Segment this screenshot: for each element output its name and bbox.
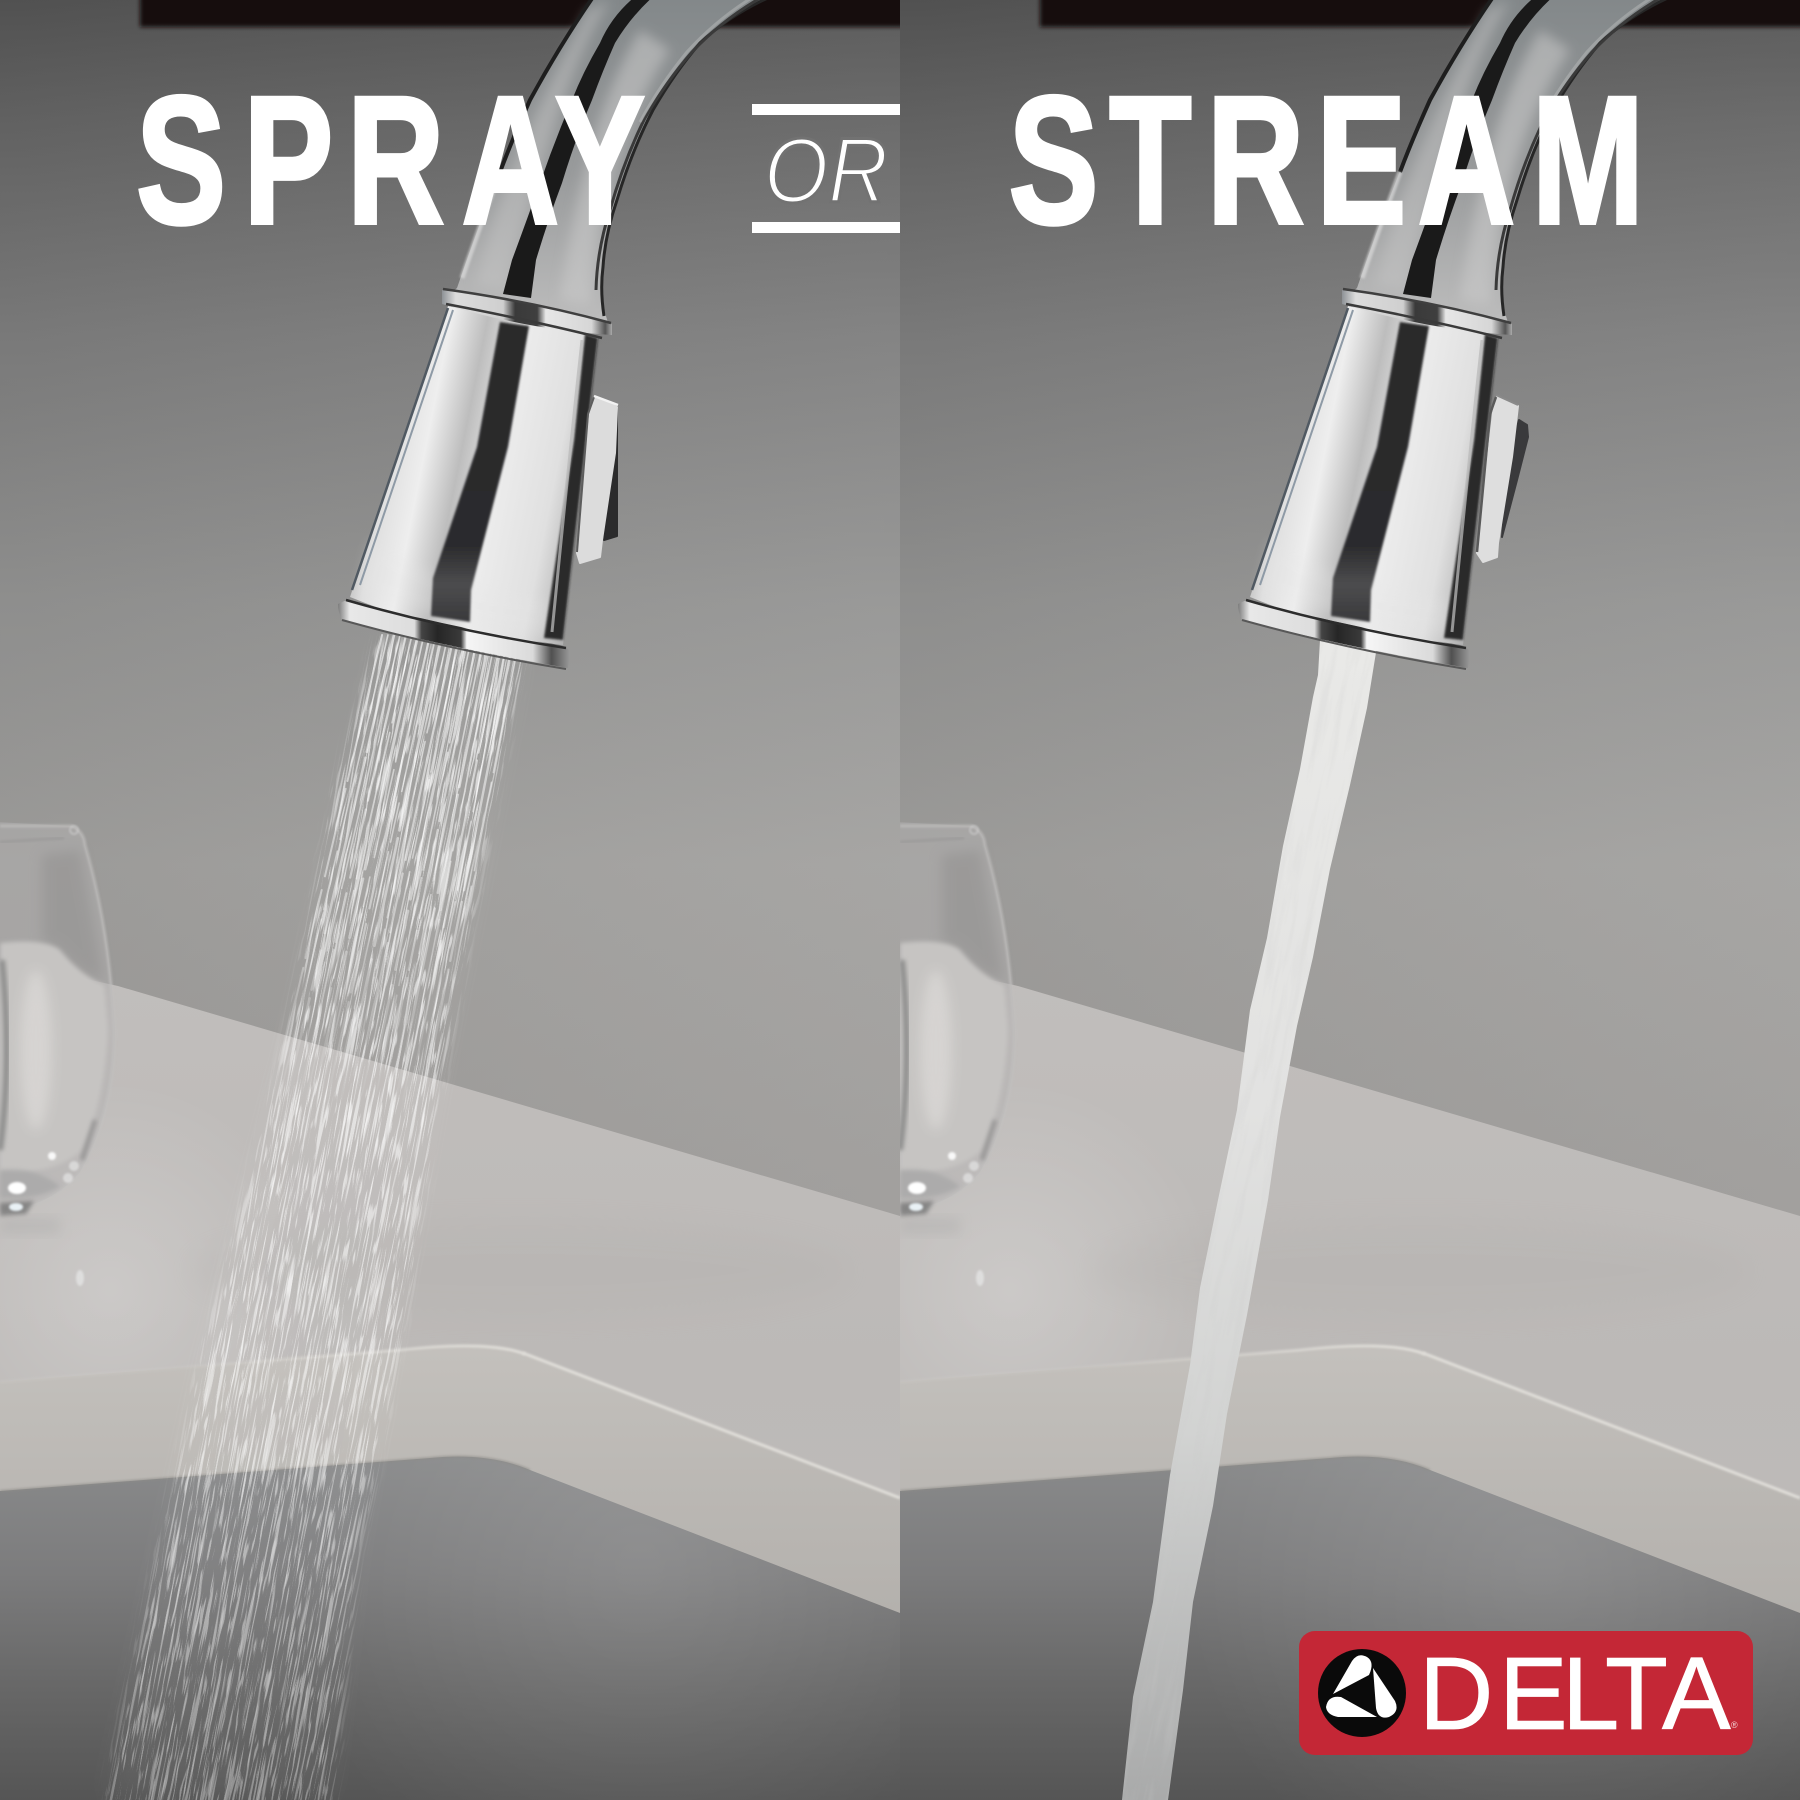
drinking glass bbox=[895, 822, 1015, 1286]
faucet pull-down spray head bbox=[1238, 0, 1670, 669]
drinking glass bbox=[0, 822, 115, 1286]
icon: toggle button bbox=[1477, 395, 1528, 562]
logo: Delta: ® bbox=[1731, 1720, 1738, 1730]
heading: SPRAY: SPRAY bbox=[136, 58, 645, 262]
panel: stream (right half) bbox=[880, 0, 1800, 1800]
countertop and sink bbox=[880, 958, 1800, 1800]
wall background and dark cabinet band bbox=[900, 0, 1800, 1800]
wall background and dark cabinet band bbox=[0, 0, 900, 1216]
spray water bbox=[102, 634, 527, 1800]
faucet pull-down spray head bbox=[338, 0, 770, 669]
logo: Delta bbox=[1299, 1631, 1753, 1755]
panel: spray (left half) bbox=[0, 0, 977, 1800]
countertop and sink bbox=[0, 958, 920, 1800]
icon: delta triangle mark bbox=[1318, 1649, 1406, 1737]
logo: Delta: DELTA bbox=[1419, 1636, 1731, 1751]
divider label: OR with rules: OR bbox=[764, 120, 888, 222]
icon: toggle button bbox=[577, 396, 618, 563]
stream water bbox=[1122, 640, 1376, 1800]
heading: STREAM: STREAM bbox=[1009, 58, 1644, 262]
